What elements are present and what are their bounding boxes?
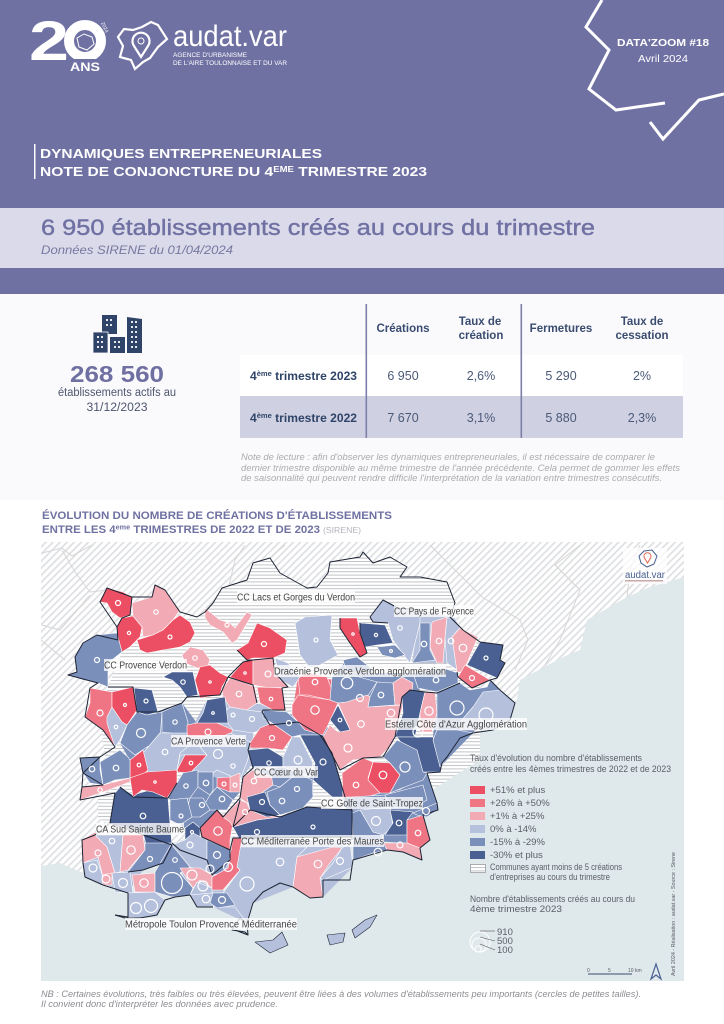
edition label: Avril 2024 xyxy=(638,54,688,65)
table: quarterly figures: Créations xyxy=(376,323,430,335)
map heading: eme xyxy=(116,524,130,532)
sea xyxy=(41,542,684,981)
footnote: NB : Certaines évolutions, très faibles ou très élevées, peuvent être liées à des volumes d'établissements peu importants (cercles de petites tailles). xyxy=(41,989,641,999)
source credit: Avril 2024 - Réalisation : audat.var - Source : Sirene xyxy=(671,852,677,976)
legend: circle sizes: 910 xyxy=(497,927,513,938)
neighbouring land xyxy=(41,542,684,873)
key figure: active establishments: 268 560 xyxy=(70,361,164,387)
territory labels: CC Golfe de Saint-Tropez xyxy=(321,798,423,810)
territory labels: CC Méditerranée Porte des Maures xyxy=(241,836,384,848)
map heading: (SIRENE) xyxy=(323,526,361,535)
table: quarterly figures: cessation xyxy=(615,330,669,342)
legend: circle sizes: 500 xyxy=(497,936,513,947)
header band xyxy=(0,0,724,294)
territory labels: CC Provence Verdon xyxy=(104,660,187,672)
stats panel background xyxy=(0,294,724,500)
territory labels: CC Lacs et Gorges du Verdon xyxy=(237,592,355,604)
edition label: DATA'ZOOM #18 xyxy=(617,37,709,49)
table: quarterly figures: 5 290 xyxy=(545,369,577,383)
legend: evolution rate: 0% à -14% xyxy=(490,824,537,835)
table: quarterly figures: Taux de xyxy=(459,316,501,328)
legend: evolution rate: -30% et plus xyxy=(490,850,543,861)
map heading: ÉVOLUTION DU NOMBRE DE CRÉATIONS D'ÉTABLISSEMENTS xyxy=(42,509,392,522)
key figure: active establishments: 31/12/2023 xyxy=(86,402,148,414)
headline band xyxy=(0,208,724,268)
document title: NOTE DE CONJONCTURE DU 4 xyxy=(40,164,235,179)
table: quarterly figures: 2% xyxy=(633,369,651,383)
legend: evolution rate: +51% et plus xyxy=(490,785,545,796)
logo: 20 ans: ANS xyxy=(70,60,100,74)
territory labels: Estérel Côte d'Azur Agglomération xyxy=(385,720,527,730)
map heading xyxy=(42,509,392,536)
table: quarterly figures: 6 950 xyxy=(387,369,419,383)
legend: circle sizes: 100 xyxy=(497,945,513,956)
key figure: active establishments: établissements actifs au xyxy=(58,387,176,399)
logo: audat.var: AGENCE D'URBANISME xyxy=(173,52,247,59)
headline band: 6 950 établissements créés au cours du trimestre xyxy=(41,215,595,240)
scale bar xyxy=(587,968,642,974)
legend: evolution rate: Taux d'évolution du nombre d'établissements xyxy=(470,753,642,764)
legend: evolution rate: +26% à +50% xyxy=(490,798,550,809)
base territory, communes with few creations xyxy=(98,552,480,840)
legend: circle sizes: Nombre d'établissements créés au cours du xyxy=(470,894,635,905)
table: quarterly figures: 4 xyxy=(250,411,257,425)
territory labels: CC Cœur du Var xyxy=(254,768,319,778)
establishment circles xyxy=(89,600,493,914)
filler colour areas under communes xyxy=(82,610,500,923)
decorative territory outline top right xyxy=(586,0,724,139)
logo: audat.var xyxy=(118,20,287,69)
table: quarterly figures: 5 880 xyxy=(545,411,577,425)
legend: evolution rate xyxy=(470,753,671,883)
reading note: de saisonnalité qui peuvent rendre difficile l'interprétation de la variation entre trimestres consécutifs. xyxy=(241,473,662,483)
legend: circle sizes: 4ème trimestre 2023 xyxy=(470,904,562,915)
footnote xyxy=(41,989,641,1009)
scale bar: 10 km xyxy=(628,968,642,974)
logo: 20 ans xyxy=(29,9,109,74)
legend: evolution rate: d'entreprises au cours du trimestre xyxy=(490,872,610,883)
logo: audat.var: audat.var xyxy=(173,20,287,53)
reading note: Note de lecture : afin d'observer les dynamiques entrepreneuriales, il est nécessaire de comparer le xyxy=(241,452,655,462)
document title: TRIMESTRE 2023 xyxy=(294,164,427,179)
table: quarterly figures: Fermetures xyxy=(530,323,592,335)
territory labels xyxy=(96,591,527,930)
table: quarterly figures: création xyxy=(459,330,503,342)
table: quarterly figures: ème xyxy=(257,411,272,420)
map heading: ENTRE LES 4 xyxy=(42,524,113,536)
icon: buildings xyxy=(93,315,142,353)
logo: audat.var: DE L'AIRE TOULONNAISE ET DU VAR xyxy=(173,60,287,67)
communes xyxy=(68,585,515,953)
table: quarterly figures: trimestre 2023 xyxy=(272,369,357,383)
document title: DYNAMIQUES ENTREPRENEURIALES xyxy=(40,146,322,161)
neighbouring boundaries xyxy=(41,545,640,670)
scale bar: 0 xyxy=(587,968,590,974)
territory labels: Métropole Toulon Provence Méditerranée xyxy=(125,920,297,930)
edition label xyxy=(617,37,709,65)
table: quarterly figures: Taux de xyxy=(621,316,663,328)
document title xyxy=(34,144,427,179)
map: Var choropleth xyxy=(41,542,684,981)
logo: 20 ans: 2024 xyxy=(99,21,109,34)
map logo: audat.var xyxy=(625,570,666,581)
table: quarterly figures: 3,1% xyxy=(467,411,495,425)
scale bar: 5 xyxy=(608,968,611,974)
north arrow xyxy=(651,964,661,979)
footnote: Il convient donc d'interpréter les données avec prudence. xyxy=(41,999,278,1009)
table: quarterly figures: 2,6% xyxy=(467,369,495,383)
legend: evolution rate: -15% à -29% xyxy=(490,837,545,848)
intercommunal boundaries xyxy=(68,552,515,935)
legend: circle sizes xyxy=(470,894,635,956)
table: quarterly figures xyxy=(240,304,683,438)
legend: evolution rate: Communes ayant moins de 5 créations xyxy=(490,862,622,873)
territory labels: CA Provence Verte xyxy=(171,736,246,748)
territory labels: CC Pays de Fayence xyxy=(394,606,474,618)
table: quarterly figures: 7 670 xyxy=(387,411,419,425)
table: quarterly figures: ème xyxy=(257,369,272,378)
territory labels: CA Sud Sainte Baume xyxy=(96,824,184,836)
table: quarterly figures: trimestre 2022 xyxy=(272,411,357,425)
table: quarterly figures: 4 xyxy=(250,369,257,383)
document title: EME xyxy=(273,165,295,174)
key figure: active establishments xyxy=(58,361,176,414)
table: quarterly figures: 2,3% xyxy=(628,411,656,425)
logo: 20 ans: 2 xyxy=(29,9,69,72)
legend: evolution rate: +1% à +25% xyxy=(490,811,545,822)
reading note xyxy=(241,452,681,483)
map logo xyxy=(623,548,667,584)
reading note: dernier trimestre disponible au même trimestre de l'année précédente. Cela permet de gommer les effets xyxy=(241,463,681,473)
territory labels: Dracénie Provence Verdon agglomération xyxy=(274,666,446,678)
headline band: Données SIRENE du 01/04/2024 xyxy=(41,245,233,257)
legend: evolution rate: créés entre les 4èmes trimestres de 2022 et de 2023 xyxy=(470,764,671,775)
map heading: TRIMESTRES DE 2022 ET DE 2023 xyxy=(130,524,320,536)
